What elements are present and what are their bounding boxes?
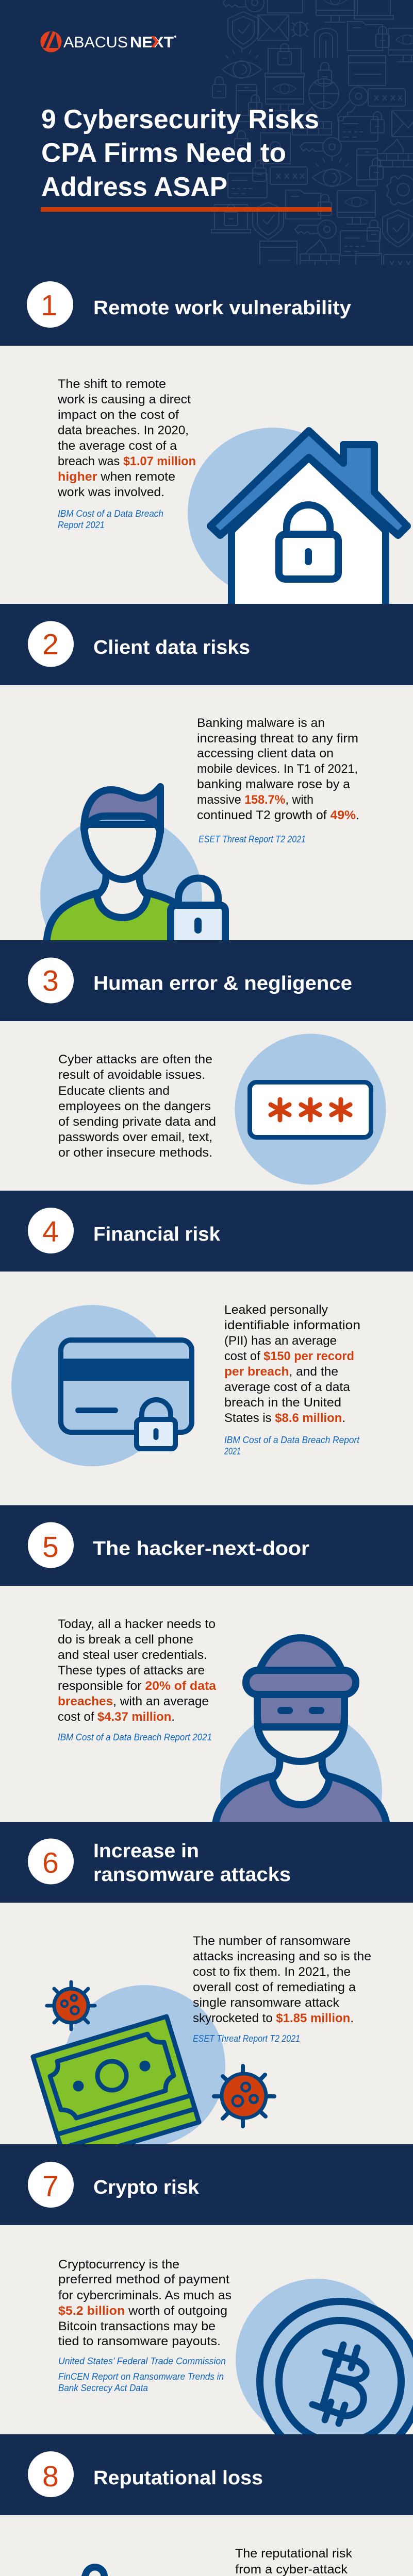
body text: Cyber attacks are often the — [58, 1053, 212, 1066]
body text: banking malware rose by a — [197, 777, 351, 791]
body text — [58, 2258, 232, 2348]
citations: FinCEN Report on Ransomware Trends in — [58, 2371, 224, 2382]
body text — [235, 2547, 368, 2576]
citation: IBM Cost of a Data Breach Report — [224, 1435, 360, 1445]
icon: dollar bill — [33, 2016, 199, 2162]
icon: masked hacker — [212, 1634, 390, 1822]
citations: Bank Secrecy Act Data — [58, 2383, 148, 2393]
body text: the average cost of a — [58, 439, 177, 453]
body text — [57, 377, 196, 499]
body text: passwords over email, text, — [58, 1130, 212, 1144]
body text: attacks increasing and so is the — [193, 1950, 371, 1963]
logo emblem — [40, 31, 62, 53]
icon: house with lock — [188, 428, 407, 608]
citation — [58, 509, 163, 530]
body text: massive 158.7%, with — [197, 793, 313, 807]
panel: ransomware attacks — [31, 1936, 371, 2144]
body text: tied to ransomware payouts. — [58, 2334, 221, 2348]
body text — [58, 1053, 216, 1160]
title: Address ASAP — [41, 172, 227, 202]
body text: Today, all a hacker needs to — [58, 1617, 216, 1631]
icon: small virus — [47, 1982, 95, 2029]
section 7 heading: 7 — [42, 2170, 59, 2203]
citations — [58, 2356, 226, 2393]
background icon pattern — [211, 0, 413, 272]
citations: United States’ Federal Trade Commission — [58, 2356, 226, 2366]
section 8 heading — [0, 2434, 413, 2515]
body text: Banking malware is an — [197, 716, 325, 730]
body text: breaches, with an average — [58, 1694, 209, 1708]
section 2 heading: 2 — [42, 628, 59, 661]
body text: preferred method of payment — [58, 2273, 229, 2286]
body text: work is causing a direct — [57, 393, 191, 406]
logo — [40, 31, 176, 53]
body text: identifiable information — [224, 1318, 360, 1332]
section 5 heading — [0, 1505, 413, 1586]
header panel — [0, 0, 413, 346]
title: 9 Cybersecurity Risks — [41, 105, 319, 134]
section 2 heading — [0, 604, 413, 685]
icon: money and viruses — [33, 1982, 274, 2162]
panel: crypto risk — [58, 2260, 413, 2434]
citation: IBM Cost of a Data Breach — [58, 509, 163, 519]
body text: increasing threat to any firm — [197, 732, 358, 745]
body text: skyrocketed to $1.85 million. — [193, 2011, 354, 2025]
panel: remote work vulnerability — [58, 379, 411, 604]
body text: Cryptocurrency is the — [58, 2258, 179, 2272]
body text: and steal user credentials. — [58, 1648, 207, 1662]
body text: The shift to remote — [58, 377, 166, 391]
icon: person with lock — [40, 783, 229, 940]
icon: large virus — [214, 2066, 274, 2126]
section 1 heading: Remote work vulnerability — [93, 297, 351, 319]
body text: Educate clients and — [58, 1084, 170, 1098]
body text: $5.2 billion worth of outgoing — [58, 2304, 227, 2318]
body text: continued T2 growth of 49%. — [197, 808, 359, 822]
body text: cost of $150 per record — [224, 1349, 354, 1363]
body text: result of avoidable issues. — [58, 1068, 205, 1082]
section 6 heading: 6 — [42, 1846, 59, 1879]
section 2 heading: Client data risks — [93, 637, 250, 658]
section 8 heading: Reputational loss — [93, 2467, 263, 2489]
icon: bitcoin coin — [236, 2279, 413, 2434]
section 4 heading — [0, 1191, 413, 1272]
body text: overall cost of remediating a — [193, 1980, 356, 1994]
title — [41, 105, 319, 202]
body text: data breaches. In 2020, — [58, 423, 189, 437]
body text: cost of $4.37 million. — [58, 1710, 175, 1724]
body text: single ransomware attack — [193, 1996, 340, 2010]
body text: States is $8.6 million. — [224, 1411, 345, 1425]
citation: 2021 — [224, 1446, 241, 1456]
body text: average cost of a data — [224, 1380, 351, 1394]
body text: impact on the cost of — [58, 408, 179, 422]
body text: higher when remote — [58, 470, 175, 484]
section 3 heading: Human error & negligence — [93, 973, 352, 994]
logo wordmark: ABACUS — [63, 34, 128, 51]
panel: client data risks — [40, 718, 358, 940]
panel: reputational loss — [81, 2548, 352, 2576]
section 7 heading — [0, 2144, 413, 2225]
citation: ESET Threat Report T2 2021 — [193, 2033, 300, 2044]
section 1 heading: 1 — [41, 289, 57, 322]
body text: Bitcoin transactions may be — [58, 2319, 216, 2333]
body text: of sending private data and — [58, 1115, 216, 1129]
section 4 heading: Financial risk — [93, 1224, 221, 1245]
section 4 heading: 4 — [42, 1215, 59, 1248]
body text: breach in the United — [224, 1396, 341, 1410]
body text: (PII) has an average — [224, 1334, 337, 1348]
section 8 heading: 8 — [42, 2460, 59, 2493]
body text — [197, 716, 359, 822]
section 6 heading: ransomware attacks — [93, 1864, 291, 1886]
body text: do is break a cell phone — [58, 1633, 193, 1647]
body text — [58, 1617, 217, 1724]
logo wordmark: NEXT — [130, 34, 174, 51]
body text: The reputational risk — [235, 2547, 353, 2561]
icon: password box — [235, 1033, 386, 1185]
body text: The number of ransomware — [193, 1934, 351, 1948]
body text: mobile devices. In T1 of 2021, — [197, 762, 358, 776]
citation — [224, 1435, 360, 1456]
panel: hacker next door — [58, 1619, 390, 1822]
body text: work was involved. — [57, 485, 164, 499]
icon: credit card with lock — [11, 1305, 194, 1466]
body text — [193, 1934, 371, 2025]
section 6 heading: Increase in — [93, 1840, 199, 1862]
logo wordmark — [63, 34, 176, 51]
citation: ESET Threat Report T2 2021 — [199, 834, 306, 844]
panel: human error and negligence — [0, 1021, 413, 1191]
section 7 heading: Crypto risk — [93, 2177, 200, 2198]
body text: Leaked personally — [224, 1303, 328, 1317]
panel: financial risk — [0, 1272, 413, 1505]
body text: These types of attacks are — [58, 1664, 205, 1677]
section 5 heading: The hacker-next-door — [93, 1538, 309, 1560]
section 3 heading — [0, 940, 413, 1021]
title underline — [41, 207, 332, 212]
citation: Report 2021 — [58, 520, 105, 530]
body text: breach was $1.07 million — [58, 454, 196, 468]
body text: or other insecure methods. — [58, 1146, 212, 1160]
body text: responsible for 20% of data — [58, 1679, 217, 1693]
citation: IBM Cost of a Data Breach Report 2021 — [58, 1732, 212, 1742]
body text: accessing client data on — [197, 747, 334, 760]
body text: per breach, and the — [224, 1365, 338, 1379]
section 5 heading: 5 — [42, 1531, 59, 1564]
section 6 heading — [0, 1822, 413, 1903]
body text — [224, 1303, 360, 1425]
title: CPA Firms Need to — [41, 138, 286, 168]
body text: employees on the dangers — [58, 1099, 211, 1113]
section 3 heading: 3 — [42, 964, 59, 997]
section 1 heading — [27, 281, 351, 328]
body text: cost to fix them. In 2021, the — [193, 1965, 351, 1979]
body text: for cybercriminals. As much as — [58, 2289, 232, 2302]
